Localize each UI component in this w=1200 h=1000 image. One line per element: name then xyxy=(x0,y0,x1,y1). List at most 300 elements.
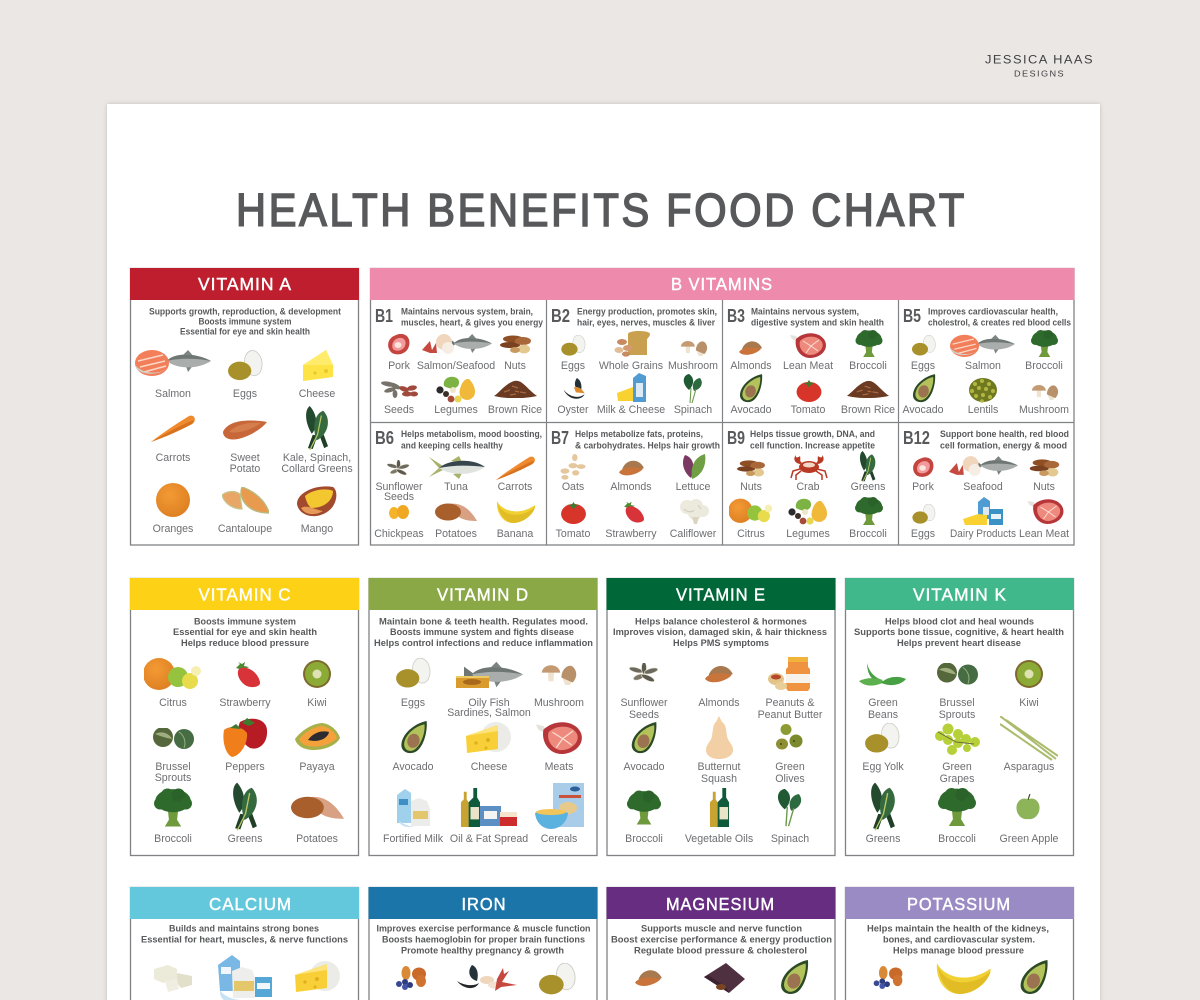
food: Citrus xyxy=(728,499,772,540)
food: Strawberry xyxy=(605,502,657,540)
food: Pork: Pork xyxy=(388,360,411,372)
food: Nuts xyxy=(500,336,531,372)
food: Tuna: Tuna xyxy=(444,481,468,493)
food: Avocado: Avocado xyxy=(392,761,434,773)
food: Avocado xyxy=(730,374,772,416)
food: Oats: Oats xyxy=(562,481,584,493)
section: B3 xyxy=(727,306,895,416)
header: B Vitamins: B VITAMINS xyxy=(671,274,773,294)
food: Kale, Spinach, Collard Greens xyxy=(281,406,353,475)
food: Salmon/Seafood: Salmon/Seafood xyxy=(417,360,495,372)
food: Green Grapes xyxy=(935,724,980,785)
header: Calcium: CALCIUM xyxy=(209,894,292,914)
header: B Vitamins xyxy=(370,268,1074,300)
text: Potassium benefits xyxy=(867,924,1049,956)
food: Oranges xyxy=(153,483,193,535)
section: B7 xyxy=(551,428,720,540)
food: Greens: Greens xyxy=(866,833,900,845)
food: Almonds: Almonds xyxy=(698,697,740,709)
food: Oyster: Oyster xyxy=(557,404,589,416)
food: Crab: Crab xyxy=(797,481,820,493)
icon: avocado xyxy=(781,960,808,994)
food: Greens xyxy=(228,783,262,845)
header: Calcium xyxy=(130,887,359,919)
logo: Jessica Haas Designs: DESIGNS xyxy=(1014,68,1065,78)
food: Greens xyxy=(851,451,885,493)
header: Vitamin D: VITAMIN D xyxy=(437,584,529,604)
food: Nuts xyxy=(1030,459,1059,493)
food: Brussel Sprouts: Brussel xyxy=(939,697,975,709)
food: Mushroom xyxy=(534,665,584,709)
food: Broccoli: Broccoli xyxy=(849,528,887,540)
icon: dried fruit xyxy=(396,966,426,990)
food: Broccoli: Broccoli xyxy=(849,360,887,372)
food: Lentils xyxy=(968,378,998,416)
section: B12: cell formation, energy & mood xyxy=(940,440,1067,450)
text: Vitamin D benefits: Helps control infections and reduce inflammation xyxy=(374,638,593,648)
section: B5: cholestrol, & creates red blood cells xyxy=(928,318,1071,328)
food: Eggs: Eggs xyxy=(561,360,585,372)
food: Fortified Milk xyxy=(383,789,444,845)
panel: Vitamin A xyxy=(130,268,359,545)
food: Dairy Products xyxy=(950,497,1016,540)
food: Peanuts & Peanut Butter xyxy=(758,657,823,721)
header: Potassium: POTASSIUM xyxy=(907,894,1011,914)
icon: tofu xyxy=(154,965,192,992)
food: Brussel Sprouts: Sprouts xyxy=(939,709,975,721)
food: Cheese: Cheese xyxy=(471,761,507,773)
food: Oats xyxy=(560,454,586,493)
food: Eggs: Eggs xyxy=(911,528,935,540)
food: Legumes: Legumes xyxy=(786,528,830,540)
food: Nuts: Nuts xyxy=(504,360,526,372)
food: Kiwi: Kiwi xyxy=(1019,697,1039,709)
food: Brown Rice: Brown Rice xyxy=(488,404,542,416)
section: B2: Energy production, promotes skin, xyxy=(577,306,717,316)
food: Pork: Pork xyxy=(912,481,935,493)
food: Almonds xyxy=(610,461,652,493)
food: Califlower: Califlower xyxy=(670,528,717,540)
text: Potassium benefits: Helps maintain the health of the kidneys, xyxy=(867,924,1049,934)
food: Kale, Spinach, Collard Greens: Kale, Spinach, xyxy=(283,452,351,464)
food: Kale, Spinach, Collard Greens: Collard Greens xyxy=(281,463,353,475)
text: Magnesium benefits: Supports muscle and nerve function xyxy=(641,924,802,934)
food: Almonds: Almonds xyxy=(730,360,772,372)
food: Green Olives xyxy=(775,724,805,785)
food: Citrus: Citrus xyxy=(737,528,765,540)
section: B3: B3 xyxy=(727,306,745,326)
food: Green Beans: Green xyxy=(868,697,898,709)
section: B6 xyxy=(374,428,542,540)
text: Iron benefits xyxy=(376,924,590,956)
food: Mango: Mango xyxy=(301,523,333,535)
food: Cereals xyxy=(535,783,584,845)
food: Eggs xyxy=(911,334,936,372)
food: Payaya xyxy=(295,723,340,773)
food: Kiwi: Kiwi xyxy=(307,697,327,709)
food: Avocado xyxy=(902,374,944,416)
food: Green Olives: Green xyxy=(775,761,805,773)
text: Magnesium benefits: Regulate blood pressure & cholesterol xyxy=(634,946,807,956)
food: Lean Meat: Lean Meat xyxy=(783,360,833,372)
header: Vitamin A: VITAMIN A xyxy=(198,274,292,294)
header: Vitamin C xyxy=(130,578,359,610)
food: Almonds xyxy=(730,341,772,372)
food: Peppers xyxy=(223,718,267,773)
header: Vitamin K: VITAMIN K xyxy=(913,584,1007,604)
food: Sunflower Seeds: Seeds xyxy=(384,491,414,503)
food: Tuna xyxy=(429,456,485,493)
food: Broccoli: Broccoli xyxy=(938,833,976,845)
food: Cheese: Cheese xyxy=(299,388,335,400)
food: Cheese xyxy=(466,722,511,773)
text: Magnesium benefits: Boost exercise performance & energy production xyxy=(611,934,832,944)
food: Nuts: Nuts xyxy=(740,481,762,493)
food: Chickpeas xyxy=(374,505,424,540)
panel: Vitamin K xyxy=(845,578,1074,856)
food: Carrots xyxy=(151,416,195,464)
food: Meats: Meats xyxy=(545,761,573,773)
food: Spinach xyxy=(674,374,712,416)
header: Vitamin A xyxy=(130,268,359,300)
food: Asparagus xyxy=(1000,716,1058,773)
food: Califlower xyxy=(670,499,717,540)
food: Spinach: Spinach xyxy=(674,404,712,416)
food: Carrots: Carrots xyxy=(498,481,532,493)
food: Brown Rice xyxy=(488,381,542,416)
food: Broccoli: Broccoli xyxy=(154,833,192,845)
panel: Vitamin E xyxy=(606,578,836,856)
section: B3: digestive system and skin health xyxy=(751,318,884,328)
food: Mushroom xyxy=(668,341,718,372)
food: Mushroom xyxy=(1019,385,1069,416)
text: Vitamin A benefits: Boosts immune system xyxy=(198,316,292,326)
food: Whole Grains: Whole Grains xyxy=(599,360,663,372)
food: Butternut Squash: Butternut xyxy=(698,761,741,773)
food: Greens: Greens xyxy=(851,481,885,493)
food: Citrus xyxy=(143,658,201,709)
food: Asparagus: Asparagus xyxy=(1004,761,1054,773)
food: Butternut Squash: Squash xyxy=(701,773,737,785)
text: Magnesium benefits xyxy=(611,924,832,956)
food: Citrus: Citrus xyxy=(159,697,187,709)
food: Cereals: Cereals xyxy=(541,833,577,845)
text: Vitamin K benefits: Helps blood clot and heal wounds xyxy=(885,616,1034,626)
text: Vitamin D benefits: Boosts immune system and fights disease xyxy=(390,627,574,637)
food: Vegetable Oils: Vegetable Oils xyxy=(685,833,753,845)
food: Mushroom: Mushroom xyxy=(534,697,584,709)
icon: dairy xyxy=(218,955,272,1000)
food: Legumes xyxy=(786,499,830,540)
header: Magnesium: MAGNESIUM xyxy=(666,894,775,914)
food: Lentils: Lentils xyxy=(968,404,998,416)
food: Payaya: Payaya xyxy=(299,761,335,773)
food: Brown Rice xyxy=(841,381,895,416)
section: B9: Helps tissue growth, DNA, and xyxy=(750,429,875,439)
text: Vitamin D benefits xyxy=(374,616,593,648)
food: Egg Yolk xyxy=(862,722,904,773)
food: Oil & Fat Spread xyxy=(450,788,528,845)
text: Vitamin E benefits: Improves vision, damaged skin, & hair thickness xyxy=(613,627,827,637)
section: B6: Helps metabolism, mood boosting, xyxy=(401,429,542,439)
food: Eggs xyxy=(561,334,586,372)
food: Vegetable Oils xyxy=(685,788,753,845)
section: B2: B2 xyxy=(551,306,570,326)
header: Potassium xyxy=(845,887,1074,919)
food: Eggs: Eggs xyxy=(401,697,425,709)
food: Banana xyxy=(497,501,535,540)
food: Sweet Potato: Sweet xyxy=(230,452,260,464)
food: Eggs xyxy=(228,349,264,400)
text: Vitamin C benefits xyxy=(173,616,317,648)
food: Cantaloupe xyxy=(218,487,272,535)
section: B7: & carbohydrates. Helps hair growth xyxy=(575,440,720,450)
food: Mushroom: Mushroom xyxy=(1019,404,1069,416)
food: Meats xyxy=(536,722,582,773)
food: Avocado xyxy=(623,722,665,773)
icon: eggs xyxy=(539,962,577,994)
logo: Jessica Haas Designs xyxy=(985,54,1094,78)
text: Iron benefits: Boosts haemoglobin for proper brain functions xyxy=(382,934,585,944)
text: Calcium benefits: Essential for heart, muscles, & nerve functions xyxy=(141,934,348,944)
food: Lettuce: Lettuce xyxy=(676,481,710,493)
icon: cheese xyxy=(295,961,340,992)
section: B5: Improves cardiovascular health, xyxy=(928,306,1058,316)
food: Carrots xyxy=(496,457,535,493)
panel: Iron xyxy=(368,887,598,1000)
panel: B Vitamins xyxy=(370,268,1074,545)
section: B9: cell function. Increase appetite xyxy=(750,440,875,450)
text: Vitamin D benefits: Maintain bone & teeth health. Regulates mood. xyxy=(379,616,588,626)
food: Tomato xyxy=(791,380,825,416)
food: Oily Fish: Oily Fish xyxy=(468,697,510,709)
food: Potatoes xyxy=(435,504,477,540)
food: Broccoli xyxy=(154,788,192,845)
food: Lean Meat xyxy=(1019,499,1069,540)
section: B6: and keeping cells healthy xyxy=(401,440,503,450)
text: Vitamin A benefits xyxy=(149,306,341,336)
food: Spinach: Spinach xyxy=(771,833,809,845)
food: Brussel Sprouts: Brussel xyxy=(155,761,191,773)
food: Greens xyxy=(866,783,900,845)
food: Greens: Greens xyxy=(228,833,262,845)
food: Sunflower Seeds: Sunflower xyxy=(620,697,668,709)
section: B1: B1 xyxy=(375,306,393,326)
food: Green Apple: Green Apple xyxy=(1000,833,1059,845)
food: Salmon xyxy=(135,350,211,400)
food: Peppers: Peppers xyxy=(225,761,265,773)
food: Green Apple xyxy=(1000,794,1059,845)
section: B2: hair, eyes, nerves, muscles & liver xyxy=(577,318,715,328)
header: Vitamin C: VITAMIN C xyxy=(198,584,292,604)
text: Vitamin E benefits xyxy=(613,616,827,648)
food: Avocado: Avocado xyxy=(730,404,772,416)
food: Milk & Cheese xyxy=(597,373,665,416)
header: Iron xyxy=(368,887,598,919)
food: Lean Meat: Lean Meat xyxy=(1019,528,1069,540)
food: Kiwi xyxy=(1015,660,1043,709)
food: Salmon/Seafood xyxy=(417,334,495,372)
text: Vitamin E benefits: Helps PMS symptoms xyxy=(673,638,769,648)
food: Eggs: Eggs xyxy=(233,388,257,400)
food: Almonds: Almonds xyxy=(610,481,652,493)
food: Seafood: Seafood xyxy=(963,481,1003,493)
food: Mango xyxy=(297,486,336,535)
panel: Magnesium xyxy=(606,887,836,1000)
food: Broccoli xyxy=(1025,330,1063,372)
food: Almonds xyxy=(698,666,740,709)
header: Vitamin E: VITAMIN E xyxy=(676,584,766,604)
food: Green Olives: Olives xyxy=(775,773,805,785)
text: Vitamin K benefits xyxy=(854,616,1064,648)
food: Nuts: Nuts xyxy=(1033,481,1055,493)
food: Pork xyxy=(388,334,411,372)
section: B5 xyxy=(902,306,1071,416)
food: Mushroom: Mushroom xyxy=(668,360,718,372)
food: Seeds: Seeds xyxy=(384,404,414,416)
food: Avocado xyxy=(392,721,434,773)
panel: Calcium xyxy=(130,887,359,1000)
text: Potassium benefits: bones, and cardiovascular system. xyxy=(883,934,1035,944)
food: Butternut Squash xyxy=(698,716,741,785)
food: Seeds xyxy=(381,380,418,416)
food: Salmon: Salmon xyxy=(155,388,191,400)
food: Potatoes xyxy=(291,797,344,845)
food: Eggs xyxy=(911,503,936,540)
food: Oil & Fat Spread: Oil & Fat Spread xyxy=(450,833,528,845)
icon: banana xyxy=(937,963,991,994)
header: Magnesium xyxy=(606,887,836,919)
food: Oily Fish: Sardines, Salmon xyxy=(447,707,531,719)
food: Lettuce xyxy=(676,454,710,493)
section: B12: Support bone health, red blood xyxy=(940,429,1069,439)
food: Potatoes: Potatoes xyxy=(296,833,338,845)
food: Green Grapes: Grapes xyxy=(940,773,974,785)
text: Iron benefits: Improves exercise performance & muscle function xyxy=(376,924,590,934)
food: Broccoli xyxy=(849,497,887,540)
text: Vitamin A benefits: Supports growth, reproduction, & development xyxy=(149,306,341,316)
food: Oranges: Oranges xyxy=(153,523,193,535)
food: Sunflower Seeds: Seeds xyxy=(629,709,659,721)
food: Sunflower Seeds: Sunflower xyxy=(375,481,423,493)
food: Seafood xyxy=(949,456,1018,493)
icon: seafood xyxy=(457,965,517,991)
food: Peanuts & Peanut Butter: Peanut Butter xyxy=(758,709,823,721)
food: Broccoli: Broccoli xyxy=(1025,360,1063,372)
food: Tomato: Tomato xyxy=(556,528,590,540)
text: Iron benefits: Promote healthy pregnancy & growth xyxy=(401,946,564,956)
panel: Potassium xyxy=(845,887,1074,1000)
food: Pork xyxy=(912,457,935,493)
food: Strawberry: Strawberry xyxy=(219,697,271,709)
food: Crab xyxy=(791,455,827,493)
icon: almonds xyxy=(635,970,662,986)
text: Vitamin C benefits: Essential for eye and skin health xyxy=(173,627,317,637)
food: Tomato xyxy=(556,502,590,540)
food: Brussel Sprouts xyxy=(153,727,194,784)
food: Green Grapes: Green xyxy=(942,761,972,773)
header: Vitamin E xyxy=(606,578,836,610)
text: Calcium benefits: Builds and maintains strong bones xyxy=(169,924,319,934)
food: Brussel Sprouts: Sprouts xyxy=(155,772,191,784)
food: Eggs xyxy=(396,657,432,709)
icon: dried fruit xyxy=(874,966,902,989)
food: Kiwi xyxy=(303,660,331,709)
food: Egg Yolk: Egg Yolk xyxy=(862,761,904,773)
text: Vitamin K benefits: Helps prevent heart disease xyxy=(897,638,1021,648)
header: Vitamin K xyxy=(845,578,1074,610)
food: Carrots: Carrots xyxy=(156,452,190,464)
section: B1: muscles, heart, & gives you energy xyxy=(401,318,543,328)
food: Spinach xyxy=(771,789,809,845)
food: Fortified Milk: Fortified Milk xyxy=(383,833,444,845)
text: Vitamin C benefits: Boosts immune system xyxy=(194,616,296,626)
text: Vitamin K benefits: Supports bone tissue, cognitive, & heart health xyxy=(854,627,1064,637)
food: Broccoli xyxy=(849,330,887,372)
section: B2 xyxy=(551,306,718,416)
food: Chickpeas: Chickpeas xyxy=(374,528,424,540)
section: B1 xyxy=(375,306,543,416)
section: B9: B9 xyxy=(727,428,745,448)
food: Sunflower Seeds xyxy=(620,662,668,721)
food: Avocado: Avocado xyxy=(623,761,665,773)
icon: dark chocolate xyxy=(704,963,745,993)
section: B7: Helps metabolize fats, proteins, xyxy=(575,429,703,439)
food: Salmon xyxy=(950,335,1015,372)
header: Vitamin D xyxy=(368,578,598,610)
food: Strawberry xyxy=(219,662,271,709)
food: Oyster xyxy=(557,378,589,416)
section: B5: B5 xyxy=(903,306,921,326)
food: Brown Rice: Brown Rice xyxy=(841,404,895,416)
text: Vitamin C benefits: Helps reduce blood pressure xyxy=(181,638,309,648)
food: Milk & Cheese: Milk & Cheese xyxy=(597,404,665,416)
panel: Vitamin C xyxy=(130,578,359,856)
header: Iron: IRON xyxy=(462,894,506,914)
food: Tomato: Tomato xyxy=(791,404,825,416)
food: Strawberry: Strawberry xyxy=(605,528,657,540)
logo: Jessica Haas Designs: JESSICA HAAS xyxy=(985,54,1094,66)
food: Nuts xyxy=(737,460,765,493)
section: B7: B7 xyxy=(551,428,569,448)
food: Green Beans xyxy=(859,663,906,721)
food: Broccoli xyxy=(625,790,663,845)
section: B6: B6 xyxy=(375,428,394,448)
food: Whole Grains xyxy=(599,331,663,372)
section: B3: Maintains nervous system, xyxy=(751,306,859,316)
section: B12: B12 xyxy=(903,428,930,448)
food: Legumes: Legumes xyxy=(434,404,478,416)
title: HEALTH BENEFITS FOOD CHART xyxy=(236,184,967,236)
food: Broccoli xyxy=(938,788,976,845)
food: Dairy Products: Dairy Products xyxy=(950,528,1016,540)
food: Banana: Banana xyxy=(497,528,533,540)
food: Sweet Potato: Potato xyxy=(230,463,260,475)
text: Vitamin E benefits: Helps balance cholesterol & hormones xyxy=(635,616,807,626)
food: Avocado: Avocado xyxy=(902,404,944,416)
food: Salmon: Salmon xyxy=(965,360,1001,372)
food: Peanuts & Peanut Butter: Peanuts & xyxy=(766,697,814,709)
food: Cantaloupe: Cantaloupe xyxy=(218,523,272,535)
section: B12 xyxy=(903,428,1069,540)
panel: Vitamin D xyxy=(368,578,598,856)
food: Lean Meat xyxy=(783,333,833,372)
text: Potassium benefits: Helps manage blood pressure xyxy=(893,946,1024,956)
food: Green Beans: Beans xyxy=(868,709,898,721)
food: Sweet Potato xyxy=(223,420,267,475)
food: Legumes xyxy=(434,377,478,416)
food: Potatoes: Potatoes xyxy=(435,528,477,540)
